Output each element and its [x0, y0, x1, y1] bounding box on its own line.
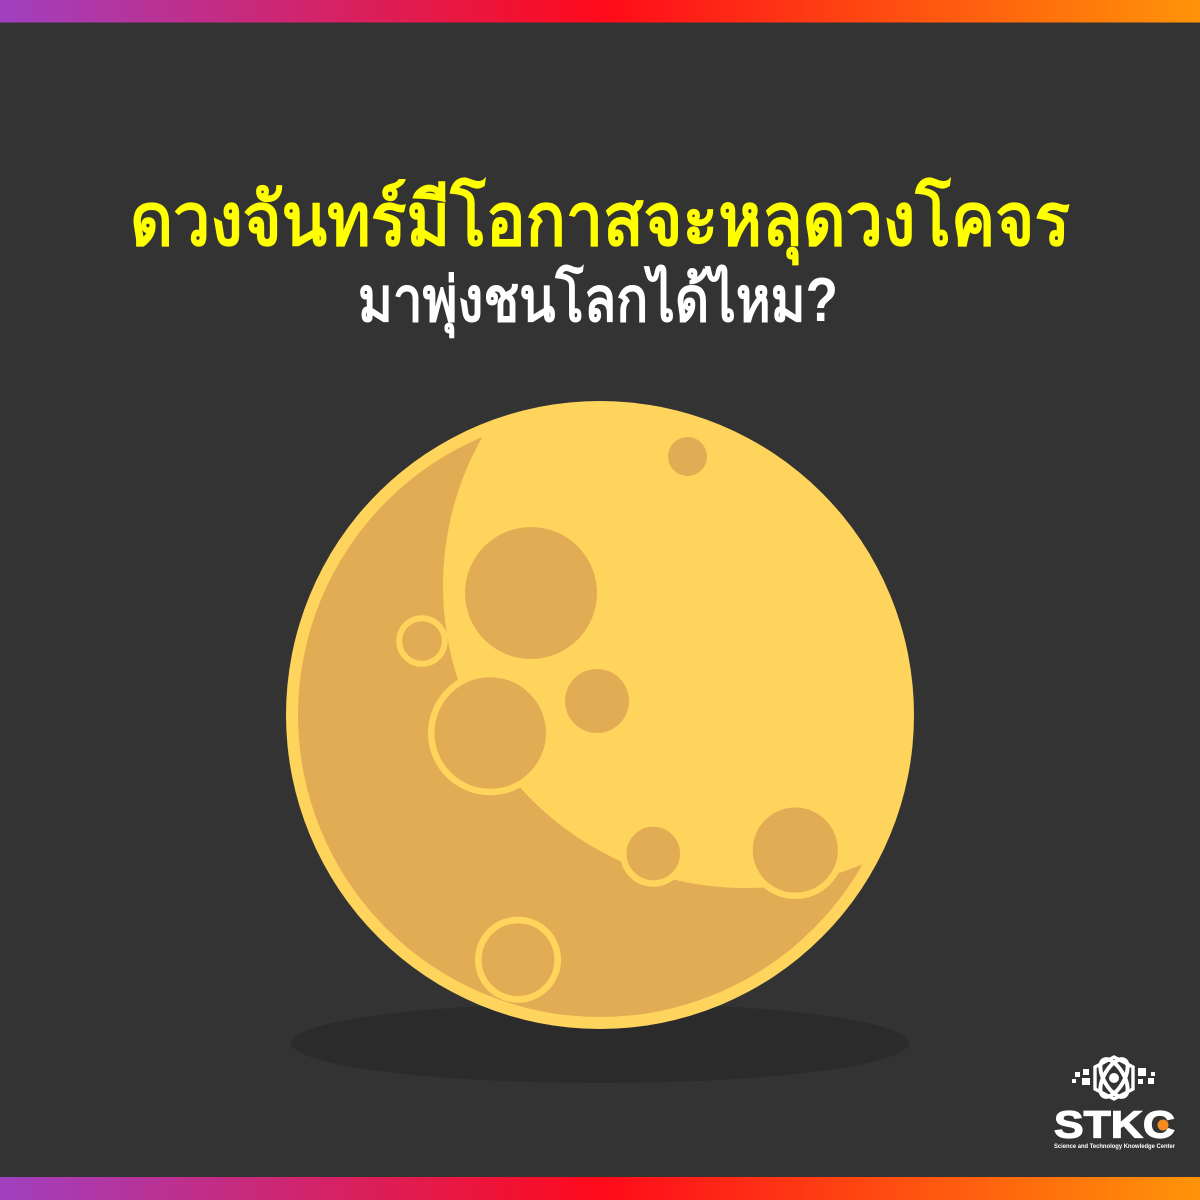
moon disc	[286, 401, 914, 1029]
crater: large upper	[465, 527, 597, 659]
bottom gradient bar	[0, 1177, 1200, 1200]
top gradient bar	[0, 0, 1200, 22]
crater: centre	[565, 669, 629, 733]
moon illustration	[286, 401, 914, 1029]
crater: ringed bottom	[478, 920, 558, 999]
crater: ringed lower right	[750, 804, 841, 896]
crater: ringed small left	[399, 618, 445, 664]
subtitle: มาพุ่งชนโลกได้ไหม?	[358, 263, 838, 338]
crater: ringed large left	[431, 674, 549, 792]
title: ดวงจันทร์มีโอกาสจะหลุดวงโคจร	[130, 176, 1070, 266]
logo tagline: Science and Technology Knowledge Center	[1054, 1143, 1175, 1150]
moon shadow	[291, 1003, 909, 1083]
logo wordmark: STKC	[1054, 1104, 1175, 1146]
logo icon: atom	[1072, 1055, 1155, 1101]
logo orange dot	[1158, 1120, 1168, 1130]
shaded crescent	[298, 437, 862, 1017]
STKC logo	[1054, 1055, 1175, 1150]
crater: ringed lower middle	[623, 824, 683, 884]
crater: top small	[668, 437, 707, 476]
